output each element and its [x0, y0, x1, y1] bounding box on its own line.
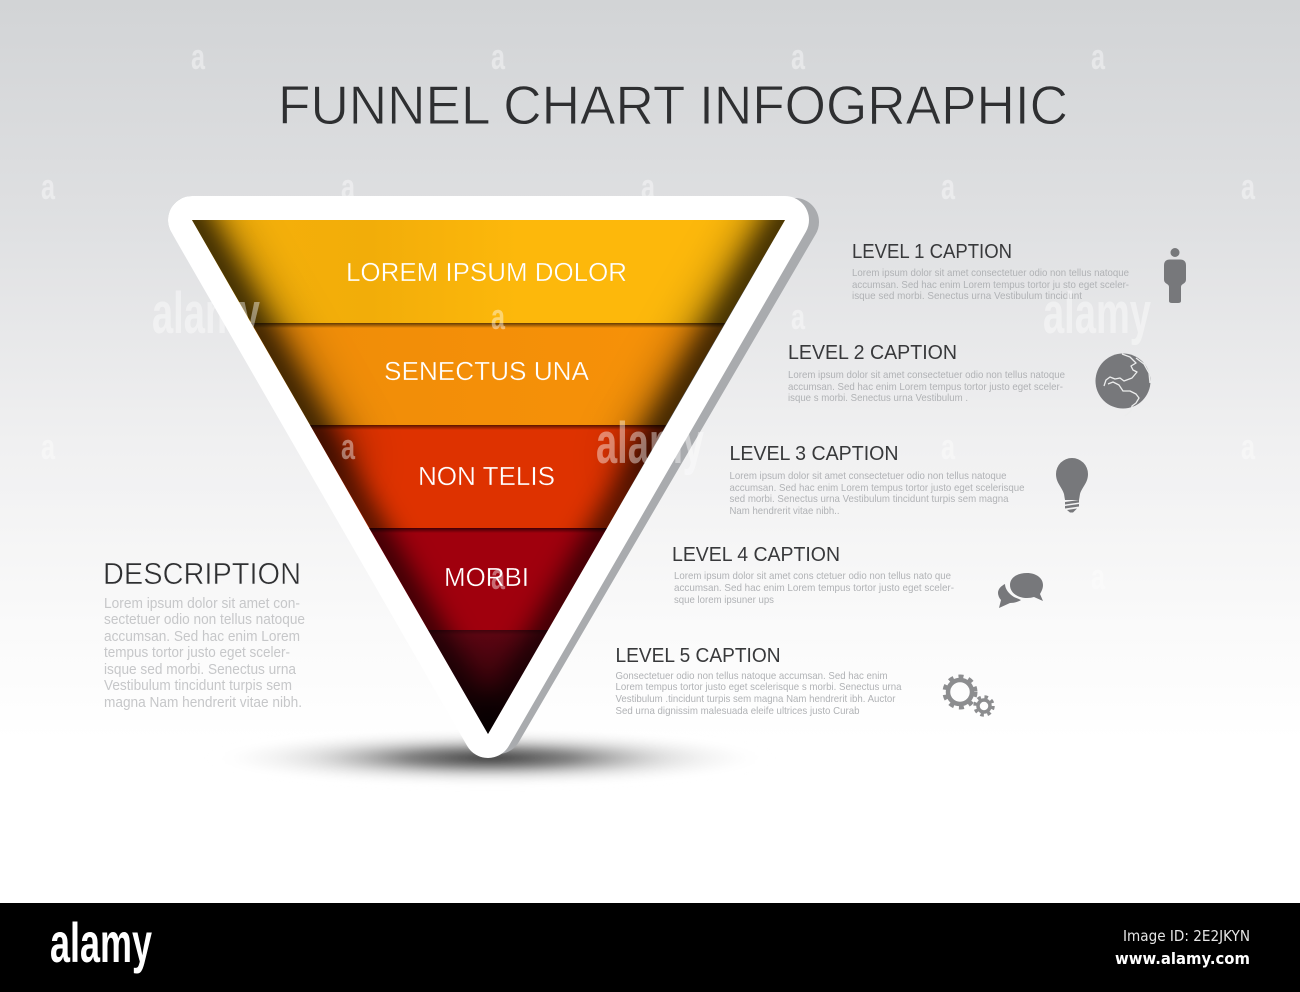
- description text: sectetuer odio non tellus natoque: [104, 612, 305, 628]
- level 2 caption: isque s morbi. Senectus urna Vestibulum .: [788, 392, 968, 404]
- description text: magna Nam hendrerit vitae nibh.: [104, 695, 302, 711]
- funnel: [168, 196, 819, 758]
- watermark: alamy: [1043, 281, 1151, 346]
- level 4 caption: [672, 544, 954, 606]
- level 1 caption: accumsan. Sed hac enim Lorem tempus tortor ju sto eget sceler-: [852, 279, 1129, 291]
- description text: tempus tortor justo eget sceler-: [104, 645, 290, 661]
- level 1 caption: isque sed morbi. Senectus urna Vestibulum tincidunt: [852, 290, 1082, 302]
- band 1: [192, 220, 785, 323]
- band label 2: SENECTUS UNA: [384, 356, 590, 386]
- watermark: [41, 36, 1256, 597]
- watermark: a: [941, 166, 956, 207]
- icon: light bulb: [1056, 458, 1088, 512]
- watermark: a: [41, 426, 56, 467]
- level 4 caption: accumsan. Sed hac enim Lorem tempus tortor justo eget sceler-: [674, 582, 954, 594]
- watermark: a: [791, 296, 806, 337]
- watermark: a: [1091, 36, 1106, 77]
- icon: gears: [944, 676, 993, 715]
- level 3 caption: [730, 443, 1025, 517]
- level 3 caption: LEVEL 3 CAPTION: [730, 443, 898, 465]
- icon: chat bubbles: [998, 573, 1043, 608]
- level 4 caption: sque lorem ipsuner ups: [674, 594, 774, 606]
- band 3: [310, 425, 666, 528]
- level 4 caption: Lorem ipsum dolor sit amet cons ctetuer odio non tellus nato que: [674, 570, 951, 582]
- description text: accumsan. Sed hac enim Lorem: [104, 629, 300, 645]
- band separators: [251, 323, 725, 635]
- band label 1: LOREM IPSUM DOLOR: [346, 257, 627, 287]
- watermark: a: [1241, 426, 1256, 467]
- watermark: a: [491, 556, 506, 597]
- title: FUNNEL CHART INFOGRAPHIC: [278, 74, 1068, 136]
- level 5 caption: Gonsectetuer odio non tellus natoque accumsan. Sed hac enim: [616, 670, 888, 682]
- level 2 caption: Lorem ipsum dolor sit amet consectetuer odio non tellus natoque: [788, 369, 1065, 381]
- funnel side extrusion: [192, 220, 795, 730]
- watermark: a: [191, 36, 206, 77]
- level 3 caption: Nam hendrerit vitae nibh..: [730, 505, 840, 517]
- funnel edge shading: [192, 220, 785, 734]
- level 1 caption: [852, 241, 1129, 302]
- level 2 caption: accumsan. Sed hac enim Lorem tempus tortor justo eget sceler-: [788, 381, 1063, 393]
- band label 3: NON TELIS: [418, 461, 555, 491]
- description text: Lorem ipsum dolor sit amet con-: [104, 596, 300, 612]
- description block: [103, 556, 305, 711]
- footer bar: [0, 903, 1300, 992]
- icon: globe: [1096, 354, 1150, 416]
- level 5 caption: [616, 645, 902, 717]
- level 2 caption: [788, 342, 1065, 404]
- background: [0, 0, 1300, 740]
- level 1 caption: Lorem ipsum dolor sit amet consectetuer odio non tellus natoque: [852, 267, 1129, 279]
- watermark: a: [1241, 166, 1256, 207]
- watermark: a: [941, 426, 956, 467]
- level 3 caption: accumsan. Sed hac enim Lorem tempus tortor justo eget scelerisque: [730, 482, 1025, 494]
- level 4 caption: LEVEL 4 CAPTION: [672, 544, 840, 566]
- watermark: alamy: [596, 411, 704, 476]
- level 1 caption: LEVEL 1 CAPTION: [852, 241, 1012, 263]
- level 3 caption: sed morbi. Senectus urna Vestibulum tincidunt turpis sem magna: [730, 493, 1009, 505]
- footer url: www.alamy.com: [1115, 949, 1250, 968]
- footer image id: Image ID: 2E2JKYN: [1123, 927, 1250, 945]
- band label 4: MORBI: [444, 562, 529, 592]
- level 3 caption: Lorem ipsum dolor sit amet consectetuer odio non tellus natoque: [730, 470, 1007, 482]
- band 5: [428, 630, 548, 734]
- description text: Vestibulum tincidunt turpis sem: [104, 678, 292, 694]
- watermark: a: [491, 36, 506, 77]
- watermark: a: [641, 166, 656, 207]
- level 5 caption: LEVEL 5 CAPTION: [616, 645, 780, 667]
- level 2 caption: LEVEL 2 CAPTION: [788, 342, 957, 364]
- description text: isque sed morbi. Senectus urna: [104, 662, 297, 678]
- footer logo: alamy: [50, 911, 152, 974]
- description text: [104, 596, 305, 711]
- funnel white frame: [192, 220, 785, 734]
- level 5 caption: Sed urna dignissim malesuada eleife ultrices justo Curab: [616, 705, 860, 717]
- icon: person: [1164, 248, 1186, 303]
- level 5 caption: Lorem tempus tortor justo eget scelerisque s morbi. Senectus urna: [616, 681, 902, 693]
- ground shadow under funnel: [205, 729, 775, 787]
- watermark: a: [491, 296, 506, 337]
- band 4: [369, 528, 607, 630]
- watermark: a: [791, 36, 806, 77]
- watermark: alamy: [152, 281, 260, 346]
- watermark: a: [341, 166, 356, 207]
- band 2: [251, 323, 725, 425]
- level 5 caption: Vestibulum .tincidunt turpis sem magna Nam hendrerit ibh. Auctor: [616, 693, 896, 705]
- watermark: a: [41, 166, 56, 207]
- description heading: DESCRIPTION: [103, 556, 301, 591]
- watermark: a: [1091, 556, 1106, 597]
- watermark: a: [341, 426, 356, 467]
